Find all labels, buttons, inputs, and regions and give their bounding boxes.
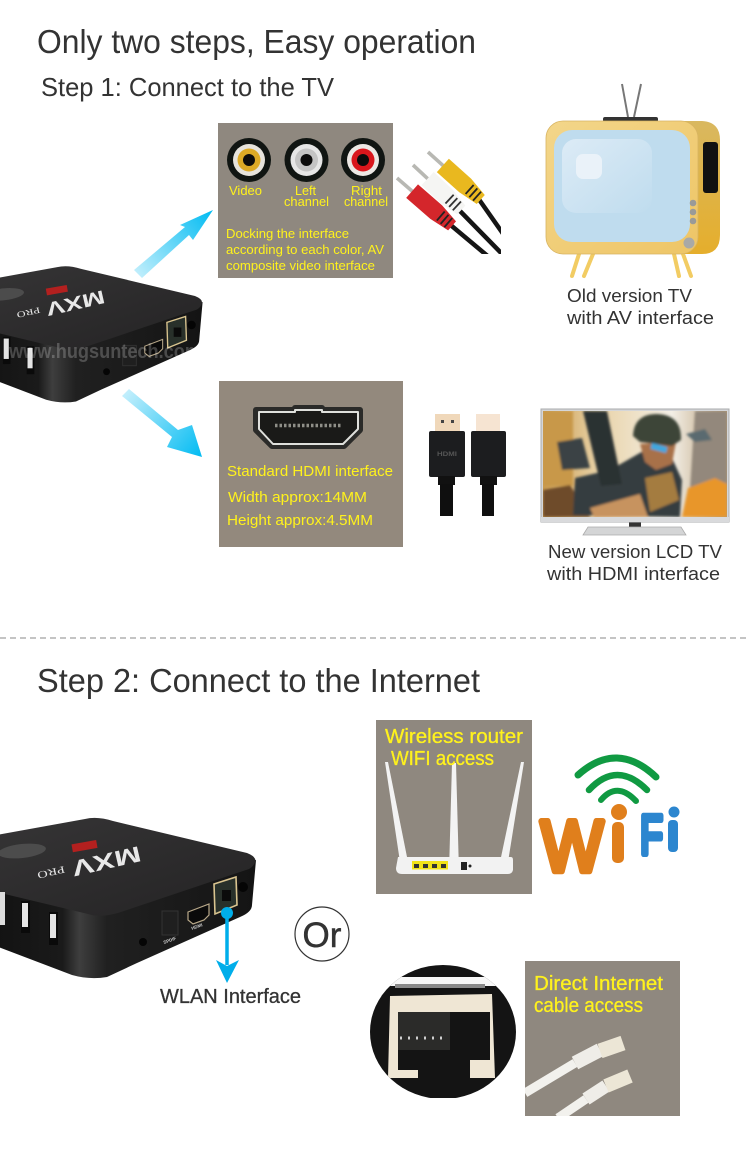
label: LCD TV: [546, 541, 723, 584]
TV box: step 1: [0, 266, 203, 402]
panel: direct cable: [525, 961, 680, 1118]
router LAN ports: [412, 861, 448, 870]
icon: LCD TV: [541, 409, 729, 535]
TV box: step 1: MXV: [44, 286, 107, 320]
AV description: according to each color, AV: [226, 243, 385, 257]
HDMI cable: HDMI: [437, 452, 457, 458]
AV description: composite video interface: [226, 259, 375, 273]
jack labels: [229, 183, 388, 209]
Or badge: Or: [303, 916, 342, 955]
RCA cable: [396, 150, 501, 254]
icon: left channel jack: [284, 138, 328, 182]
icon: video jack: [227, 138, 271, 182]
panel: wireless router: [376, 720, 532, 894]
game scene: [543, 411, 727, 517]
HDMI description: Height approx:4.5MM: [227, 512, 373, 529]
cable heading: [534, 973, 663, 1017]
heading: step 1: Step 1: Connect to the TV: [41, 72, 335, 102]
panel: HDMI interface: [219, 381, 403, 547]
arrow: to AV: [134, 210, 213, 278]
label: old TV: with AV interface: [566, 307, 714, 328]
icon: old TV: [546, 84, 720, 276]
panel: AV interface: [218, 123, 393, 278]
arrow: to HDMI: [122, 389, 202, 457]
jack labels: Video: [229, 183, 262, 198]
cable heading: Direct Internet: [534, 973, 663, 995]
TV box: step 2: HDMI: [191, 922, 203, 931]
title: Only two steps, Easy operation: [37, 23, 476, 60]
TV box: step 2: SPDIF: [163, 936, 177, 945]
watermark: www.hugsuntech.com: [8, 341, 201, 363]
TV box: step 1: PRO: [16, 305, 41, 320]
TV box: step 2: PRO: [36, 863, 66, 880]
photo: RJ45 port close-up: [370, 965, 517, 1098]
router heading: Wireless router: [385, 726, 523, 748]
TV box: step 2: MXV: [69, 841, 143, 881]
HDMI cable: [429, 414, 506, 516]
ethernet cables: [525, 1043, 630, 1118]
label: old TV: Old version TV: [567, 285, 693, 306]
label: LCD TV: New version LCD TV: [548, 541, 723, 562]
jack labels: channel: [344, 194, 388, 209]
AV description: [226, 227, 385, 273]
TV box: step 2: [0, 818, 256, 978]
icon: HDMI port: [256, 408, 360, 446]
HDMI description: Standard HDMI interface: [227, 463, 393, 480]
Or badge: [295, 907, 349, 961]
label: LCD TV: with HDMI interface: [546, 563, 720, 584]
HDMI pins: [275, 424, 342, 427]
icon: WiFi logo: W: [541, 807, 603, 887]
jack labels: Right: [351, 183, 382, 198]
label: WLAN interface: WLAN Interface: [160, 986, 301, 1008]
router heading: WIFI access: [391, 748, 494, 770]
arrow: WLAN port: [216, 907, 239, 983]
router antennas: [385, 762, 524, 872]
label: old TV: [566, 285, 714, 328]
HDMI description: Width approx:14MM: [228, 489, 367, 506]
jack labels: Left: [295, 183, 316, 198]
jack labels: channel: [284, 194, 329, 209]
router body: [396, 857, 513, 874]
router heading: [385, 726, 523, 770]
icon: WiFi logo: F: [640, 803, 663, 866]
cable heading: cable access: [534, 995, 643, 1017]
HDMI description: [227, 463, 393, 529]
icon: WiFi logo: [541, 758, 680, 887]
AV description: Docking the interface: [226, 227, 349, 241]
heading: step 2: Step 2: Connect to the Internet: [37, 662, 480, 699]
icon: right channel jack: [341, 138, 385, 182]
